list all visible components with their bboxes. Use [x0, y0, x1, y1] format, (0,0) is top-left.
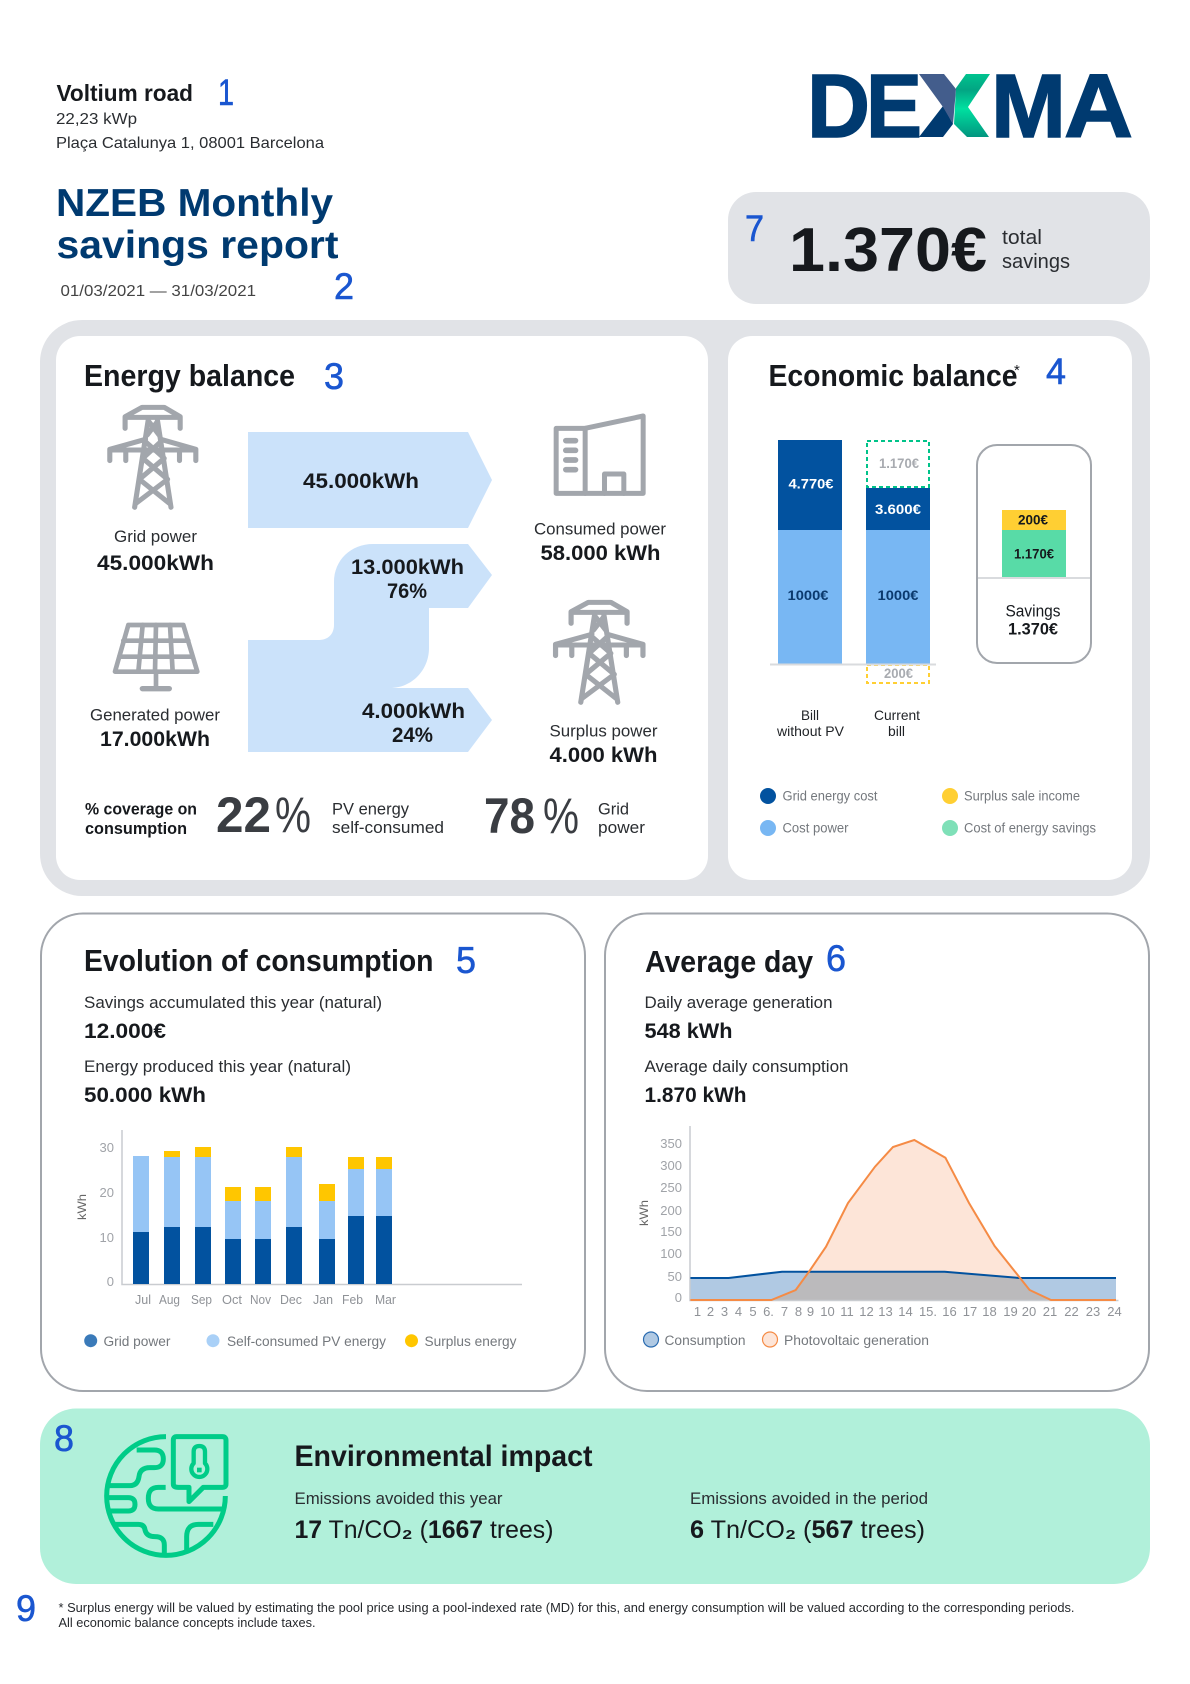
area chart: average day: 23	[1086, 1304, 1100, 1319]
savings box: 1.370€	[1008, 620, 1059, 638]
chart baseline	[770, 664, 936, 666]
heading: average day: Average day	[645, 944, 814, 979]
panel: total savings: 1.370€	[789, 216, 987, 285]
stacked bar: current bill: 1000€	[878, 587, 919, 603]
number 3: 3	[324, 356, 344, 397]
surplus power label	[550, 722, 658, 767]
report period: 01/03/2021 — 31/03/2021	[60, 283, 256, 300]
surplus power label: Surplus power	[550, 722, 658, 740]
heading: evolution of consumption: Evolution of consumption	[84, 943, 434, 978]
area chart: average day: 15.	[919, 1304, 937, 1319]
number 9: 9	[16, 1588, 36, 1629]
stat: 22% PV energy self-consumed: PV energy	[332, 800, 409, 818]
legend: average day: Photovoltaic generation	[784, 1333, 929, 1348]
bar chart: monthly energy: kWh	[75, 1194, 89, 1220]
asterisk: *	[1014, 362, 1020, 379]
grid power label	[97, 527, 214, 575]
arrow: generated split to consumed and surplus: 13.000kWh	[351, 556, 464, 579]
number 4: 4	[1046, 351, 1066, 392]
logo: DEXMA: M	[991, 57, 1066, 157]
area chart: average day: 5	[749, 1304, 757, 1319]
panel: total savings: savings	[1002, 251, 1070, 273]
panel: total savings: 7	[745, 208, 764, 249]
daily stats: 1.870 kWh	[644, 1084, 746, 1107]
area chart: average day: 14	[898, 1304, 913, 1319]
area chart: average day: 0	[675, 1290, 682, 1305]
bar chart: monthly energy: Dec	[280, 1292, 302, 1307]
footnote: * Surplus energy will be valued by estimating the pool price using a pool-indexed rate (MD) for this, and energy consumption will be valued according to the corresponding periods.	[58, 1600, 1074, 1615]
report title	[56, 182, 339, 267]
generated power label	[90, 706, 220, 751]
panel: energy balance	[56, 336, 708, 880]
site name and details: 22,23 kWp	[56, 111, 137, 128]
stacked bar: current bill	[866, 441, 930, 683]
report title: savings report	[56, 224, 339, 267]
stat: 78% grid power: %	[543, 788, 579, 844]
logo: DEXMA: A	[1064, 57, 1133, 157]
area chart: average day: 50	[668, 1269, 682, 1284]
site name and details	[56, 80, 324, 152]
icon: grid power tower	[110, 407, 196, 507]
stat: 22% PV energy self-consumed: self-consumed	[332, 818, 444, 837]
icon: solar panel	[115, 625, 197, 689]
area chart: average day: 100	[660, 1246, 682, 1261]
surplus power label: 4.000 kWh	[550, 744, 658, 767]
arrow: generated split to consumed and surplus	[248, 544, 492, 752]
area chart: average day: kWh	[637, 1200, 651, 1226]
icon: surplus power tower	[556, 602, 643, 702]
area chart: average day: 250	[660, 1180, 682, 1195]
site name and details: Voltium road	[56, 80, 193, 106]
area chart: average day: 3	[721, 1304, 728, 1319]
legend: economic balance	[760, 788, 1096, 836]
footnote: All economic balance concepts include taxes.	[58, 1615, 316, 1630]
site name and details: Plaça Catalunya 1, 08001 Barcelona	[56, 135, 324, 152]
panel: total savings: total	[1002, 227, 1042, 249]
savings box	[977, 445, 1091, 663]
stat: 22% PV energy self-consumed	[216, 787, 444, 843]
panel: total savings	[728, 192, 1150, 304]
stat: 78% grid power: 78	[484, 788, 535, 844]
savings stats: Energy produced this year (natural)	[84, 1057, 351, 1076]
coverage label: consumption	[85, 819, 187, 838]
bar labels: bill	[888, 723, 905, 739]
stacked bar: bill without PV: 1000€	[788, 587, 829, 603]
bar chart: monthly energy	[75, 1130, 522, 1307]
logo: DEXMA: D	[807, 57, 870, 157]
area chart: average day: 8	[795, 1304, 802, 1319]
bar chart: monthly energy: Aug	[159, 1292, 180, 1307]
savings stats	[84, 993, 382, 1107]
bar labels: Bill	[801, 707, 819, 723]
number 5: 5	[456, 940, 476, 981]
area chart: average day: 200	[660, 1203, 682, 1218]
report title: NZEB Monthly	[56, 182, 333, 225]
legend: average day	[644, 1332, 929, 1348]
bar chart: monthly energy: 0	[107, 1274, 114, 1289]
stacked bar: bill without PV	[778, 440, 842, 664]
grid power label: 45.000kWh	[97, 552, 214, 575]
area chart: average day: 300	[660, 1158, 682, 1173]
area chart: average day	[637, 1126, 1122, 1319]
emissions avoided in the period	[690, 1489, 928, 1544]
bar chart: monthly energy: 30	[100, 1140, 114, 1155]
area chart: average day: 10	[820, 1304, 835, 1319]
stacked bar: current bill: 200€	[884, 665, 913, 681]
bar chart: monthly energy: Feb	[342, 1292, 363, 1307]
grid power label: Grid power	[114, 527, 197, 546]
arrow: generated split to consumed and surplus: 4.000kWh	[362, 700, 465, 723]
daily stats: Daily average generation	[644, 993, 832, 1012]
number 2: 2	[334, 266, 354, 307]
savings box: 200€	[1018, 512, 1048, 528]
legend: economic balance: Cost power	[782, 820, 849, 836]
area chart: average day: 24	[1107, 1304, 1122, 1319]
area chart: average day: 12	[859, 1304, 874, 1319]
stat: 78% grid power: Grid	[598, 800, 629, 818]
number 6: 6	[826, 938, 846, 979]
heading: energy balance: Energy balance	[84, 358, 295, 393]
savings stats: 50.000 kWh	[84, 1084, 206, 1107]
area chart: average day: 4	[735, 1304, 742, 1319]
arrow: grid to consumed: 45.000kWh	[303, 470, 419, 493]
area chart: average day: 350	[660, 1136, 682, 1151]
generated power label: 17.000kWh	[100, 728, 210, 751]
bar chart: monthly energy: Sep	[191, 1292, 212, 1307]
bar chart: monthly energy: 20	[100, 1185, 114, 1200]
icon: consumed power building	[556, 416, 643, 493]
area chart: average day: 150	[660, 1224, 682, 1239]
panel: average day	[605, 914, 1149, 1391]
generated power label: Generated power	[90, 706, 220, 724]
arrow: generated split to consumed and surplus: 24%	[392, 724, 433, 747]
stacked bar: current bill: 3.600€	[875, 501, 921, 517]
legend: economic balance: Cost of energy savings	[964, 820, 1096, 836]
daily stats	[644, 993, 848, 1107]
footnote	[58, 1600, 1074, 1630]
emissions avoided in the period: 6 Tn/CO₂ (567 trees)	[690, 1516, 925, 1544]
daily stats: Average daily consumption	[644, 1057, 848, 1076]
savings box: 1.170€	[1014, 546, 1054, 562]
area chart: average day: 6.	[763, 1304, 774, 1319]
bar labels: without PV	[776, 723, 845, 739]
savings box: Savings	[1006, 602, 1060, 620]
area chart: average day: 17	[963, 1304, 977, 1319]
arrow: generated split to consumed and surplus: 76%	[387, 580, 427, 603]
bar chart: monthly energy: 10	[100, 1230, 114, 1245]
number 8: 8	[54, 1418, 74, 1459]
heading: economic balance: Economic balance	[768, 358, 1018, 393]
savings stats: Savings accumulated this year (natural)	[84, 993, 382, 1012]
legend: evolution of consumption	[84, 1334, 517, 1349]
area chart: average day: 19	[1003, 1304, 1018, 1319]
stat: 78% grid power	[484, 788, 645, 844]
legend: evolution of consumption: Grid power	[104, 1334, 171, 1349]
icon: globe with thermometer	[107, 1437, 226, 1555]
area chart: average day: 18	[982, 1304, 997, 1319]
daily stats: 548 kWh	[644, 1020, 732, 1043]
legend: evolution of consumption: Surplus energy	[424, 1334, 517, 1349]
legend: average day: Consumption	[664, 1333, 746, 1348]
bar chart: monthly energy: Jan	[313, 1292, 333, 1307]
area chart: average day: 11	[840, 1304, 854, 1319]
stacked bar: current bill: 1.170€	[879, 455, 919, 471]
panel: environmental impact	[40, 1408, 1150, 1584]
bar chart: monthly energy: Oct	[222, 1292, 242, 1307]
stat: 22% PV energy self-consumed: %	[275, 787, 311, 843]
panel: economic balance	[728, 336, 1132, 880]
logo: DEXMA: E	[866, 57, 922, 157]
bar labels: Current	[874, 707, 920, 723]
area chart: average day: 22	[1064, 1304, 1079, 1319]
panel: energy and economic balance background	[40, 320, 1150, 896]
area chart: average day: 16	[942, 1304, 957, 1319]
stacked bar: bill without PV: 4.770€	[788, 476, 834, 492]
bar chart: monthly energy: Mar	[375, 1292, 397, 1307]
savings stats: 12.000€	[84, 1020, 166, 1043]
area chart: average day: 7	[781, 1304, 788, 1319]
area chart: average day: 20	[1022, 1304, 1036, 1319]
coverage label	[85, 800, 197, 838]
logo: DEXMA	[807, 57, 1133, 157]
area chart: average day: 9	[807, 1304, 814, 1319]
consumed power label: 58.000 kWh	[540, 542, 660, 565]
area chart: average day: 1	[694, 1304, 701, 1319]
coverage label: % coverage on	[85, 800, 197, 818]
area chart: average day: 2	[707, 1304, 714, 1319]
legend: evolution of consumption: Self-consumed PV energy	[227, 1334, 386, 1349]
heading: environmental impact: Environmental impact	[294, 1440, 593, 1473]
emissions avoided this year: Emissions avoided this year	[294, 1489, 503, 1508]
panel: evolution of consumption	[41, 914, 585, 1391]
arrow: grid to consumed	[248, 432, 492, 528]
emissions avoided this year	[294, 1489, 554, 1544]
area chart: average day: 13	[878, 1304, 893, 1319]
bar labels	[776, 707, 920, 739]
consumed power label: Consumed power	[534, 520, 666, 538]
stat: 78% grid power: power	[598, 818, 645, 837]
bar chart: monthly energy: Jul	[135, 1292, 151, 1307]
legend: economic balance: Surplus sale income	[964, 788, 1080, 804]
legend: economic balance: Grid energy cost	[782, 788, 878, 804]
number 1: 1	[218, 72, 234, 113]
area chart: average day: 21	[1043, 1304, 1057, 1319]
consumed power label	[534, 520, 666, 565]
stat: 22% PV energy self-consumed: 22	[216, 787, 271, 843]
emissions avoided in the period: Emissions avoided in the period	[690, 1489, 928, 1508]
bar chart: monthly energy: Nov	[250, 1292, 271, 1307]
emissions avoided this year: 17 Tn/CO₂ (1667 trees)	[294, 1516, 554, 1544]
